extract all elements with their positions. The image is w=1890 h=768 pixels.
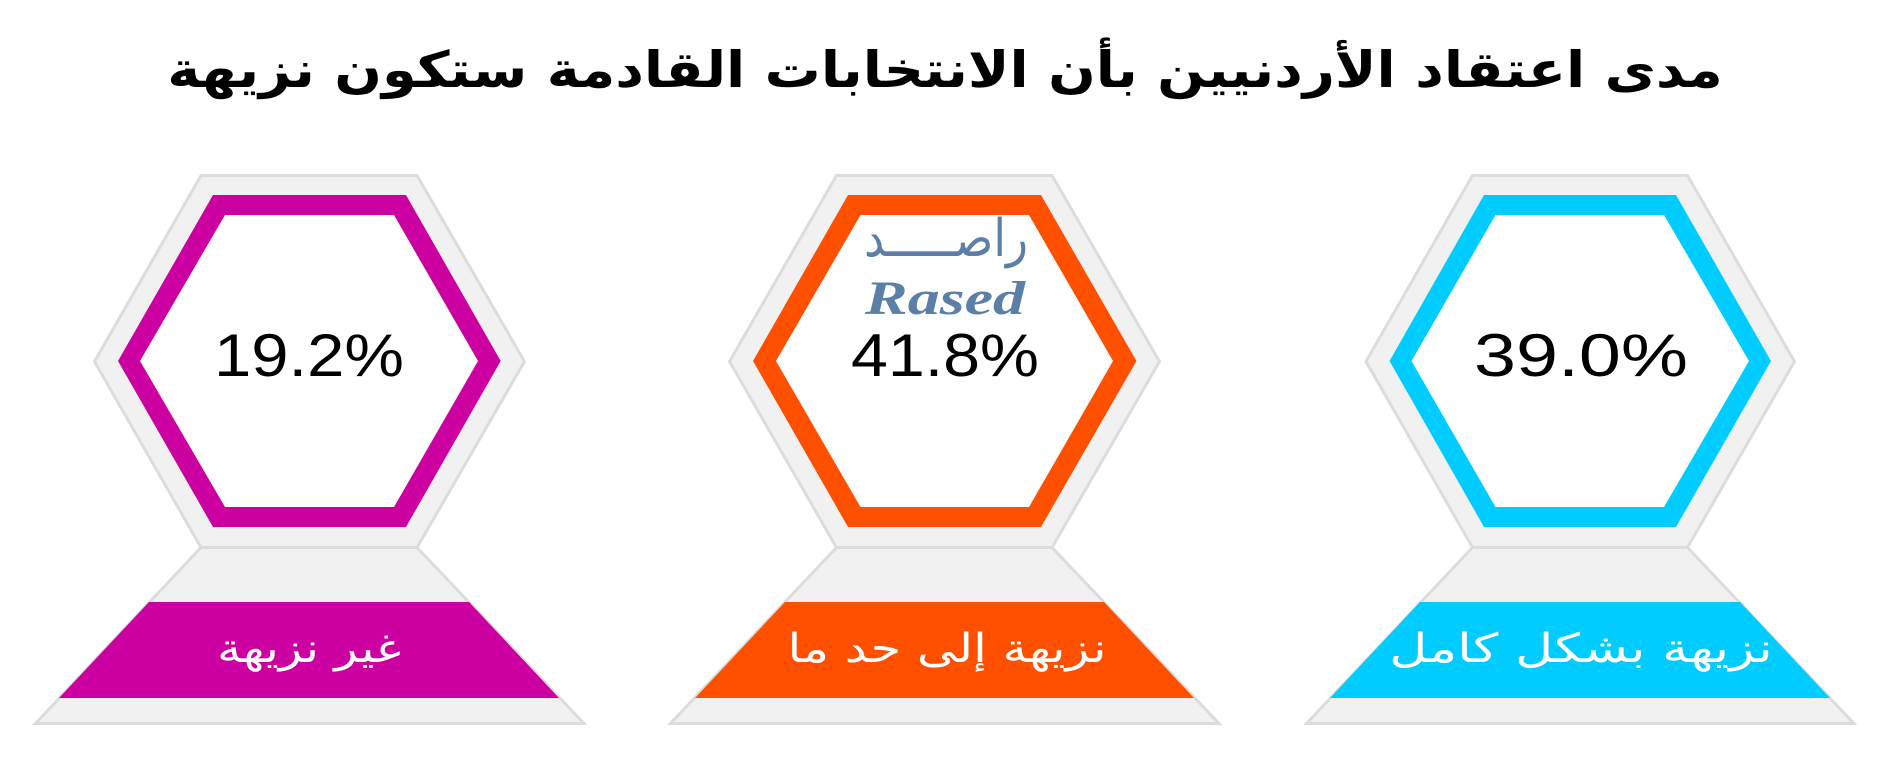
frame: hexagon and base: [670, 176, 1219, 724]
label band: [695, 602, 1194, 698]
panel: fully fair: [1306, 176, 1854, 724]
label band: [1330, 602, 1830, 698]
label: غير نزيهة: [217, 626, 401, 672]
panel: somewhat fair: [670, 176, 1219, 724]
frame: hexagon and base: [1306, 176, 1854, 724]
value: 39.0%: [1474, 322, 1688, 389]
logo Latin wordmark: Rased: [864, 272, 1026, 325]
hexagon ring: [118, 195, 501, 527]
hexagon ring: [753, 195, 1136, 527]
hexagon centre: [1412, 215, 1749, 507]
logo: Rased: [864, 208, 1028, 325]
panel: not fair: [36, 176, 584, 724]
label: نزيهة إلى حد ما: [788, 625, 1106, 672]
value: 41.8%: [851, 322, 1039, 389]
hexagon centre: [776, 215, 1113, 507]
hexagon centre: [140, 215, 478, 507]
hexagon ring: [1390, 195, 1771, 527]
label band: [59, 602, 559, 698]
logo Arabic wordmark: راصـــــد: [864, 208, 1028, 269]
title: مدى اعتقاد الأردنيين بأن الانتخابات القادمة ستكون نزيهة: [167, 37, 1723, 99]
label: نزيهة بشكل كامل: [1389, 626, 1773, 672]
value: 19.2%: [214, 322, 404, 389]
frame: hexagon and base: [36, 176, 584, 724]
